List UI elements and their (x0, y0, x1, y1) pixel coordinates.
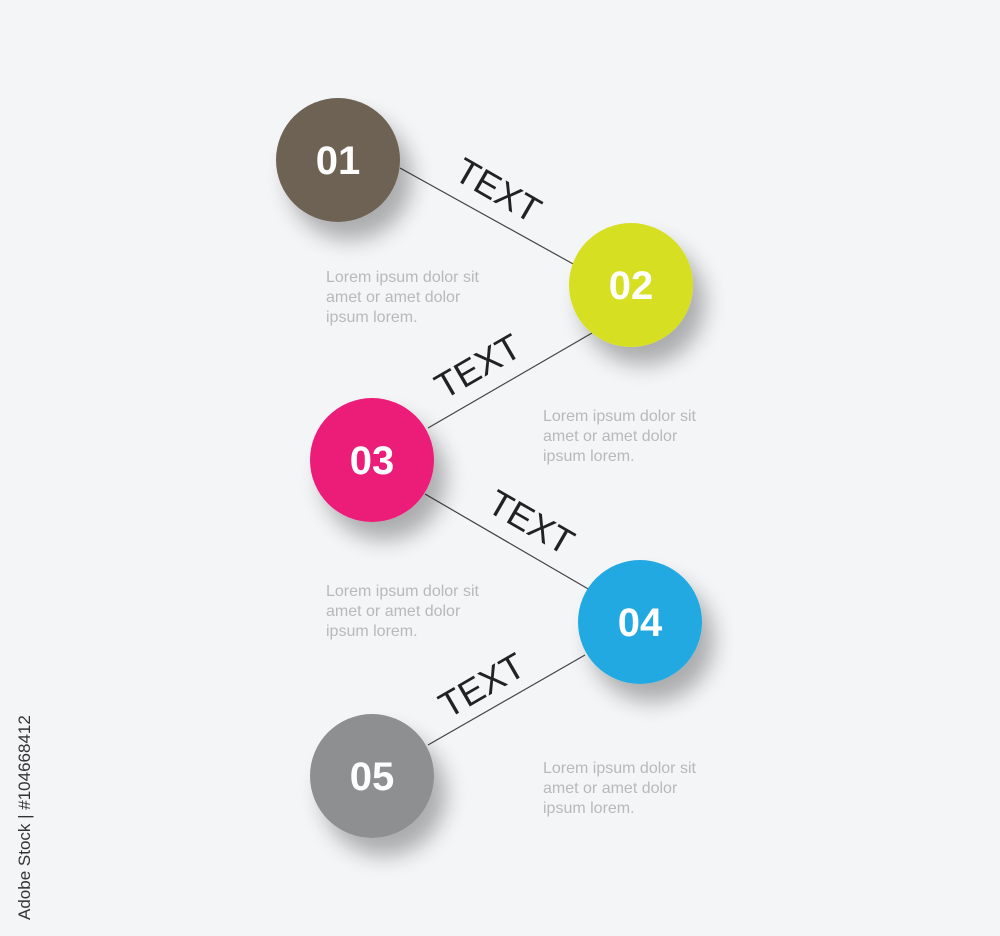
label: TEXT 3: TEXT (481, 481, 581, 563)
text block 2: amet or amet dolor (543, 428, 678, 445)
text block 2 (543, 408, 696, 465)
circle 01 (276, 98, 400, 222)
text block 2: Lorem ipsum dolor sit (543, 408, 696, 425)
text block 3: Lorem ipsum dolor sit (326, 583, 480, 600)
circle 03 (310, 398, 434, 522)
circle 02 (569, 223, 693, 347)
connector line 03-04 (425, 494, 590, 590)
connector line 04-05 (428, 655, 585, 745)
text block 1: ipsum lorem. (326, 309, 418, 326)
text block 3: ipsum lorem. (326, 623, 418, 640)
watermark credit: Adobe Stock | #104668412 (15, 715, 34, 920)
circle 05: 05 (350, 755, 394, 799)
connector line 02-03 (428, 333, 592, 428)
text block 1: amet or amet dolor (326, 289, 461, 306)
text block 1: Lorem ipsum dolor sit (326, 269, 480, 286)
label: TEXT 2: TEXT (428, 325, 528, 407)
connector line 01-02 (400, 168, 575, 265)
text block 3: amet or amet dolor (326, 603, 461, 620)
circle 02: 02 (609, 264, 653, 308)
label: TEXT 1: TEXT (448, 149, 548, 231)
circle 04 (578, 560, 702, 684)
circle 04: 04 (618, 601, 663, 645)
text block 1 (326, 269, 480, 326)
text block 3 (326, 583, 480, 640)
circle 01: 01 (316, 139, 360, 183)
text block 4 (543, 760, 696, 817)
circle 05 (310, 714, 434, 838)
label: TEXT 4: TEXT (432, 644, 532, 726)
circle 03: 03 (350, 439, 394, 483)
text block 4: ipsum lorem. (543, 800, 635, 817)
text block 2: ipsum lorem. (543, 448, 635, 465)
text block 4: Lorem ipsum dolor sit (543, 760, 696, 777)
text block 4: amet or amet dolor (543, 780, 678, 797)
